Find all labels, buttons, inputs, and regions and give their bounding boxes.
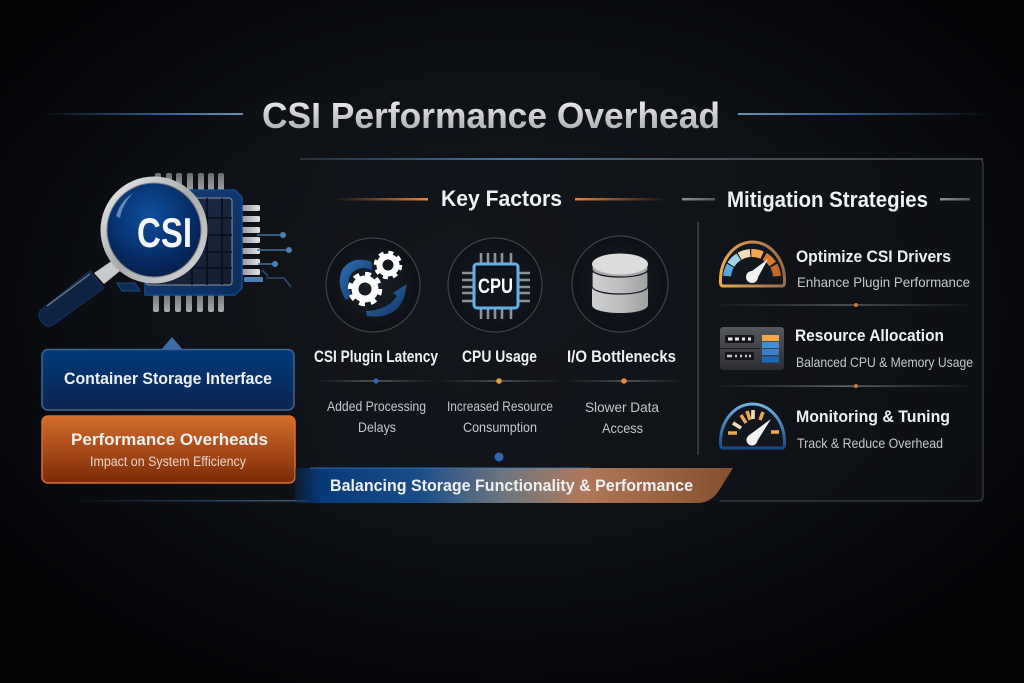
column: I/O Bottlenecks: Access — [602, 420, 643, 436]
icon: gears — [326, 238, 420, 332]
icon: CSI magnifier over chip — [39, 173, 292, 326]
icon: CPU: CPU — [478, 275, 513, 298]
strategy: Monitoring & Tuning: Track & Reduce Overhead — [797, 435, 943, 451]
strategy: Optimize CSI Drivers: Enhance Plugin Performance — [797, 274, 970, 290]
strategy: Resource Allocation — [719, 326, 973, 388]
strategy: Monitoring & Tuning: Monitoring & Tuning — [796, 407, 950, 426]
column: CPU Usage — [443, 238, 557, 435]
panel: main frame — [60, 158, 983, 502]
strategy: Resource Allocation: Balanced CPU & Memory Usage — [796, 354, 973, 370]
column: I/O Bottlenecks: Slower Data — [585, 399, 659, 415]
chip pins — [153, 173, 263, 312]
magnifier lens — [100, 176, 208, 284]
chip body — [117, 190, 242, 295]
column: CSI Plugin Latency: CSI Plugin Latency — [314, 347, 438, 366]
strategy: Optimize CSI Drivers: Optimize CSI Drivers — [796, 247, 951, 266]
label: Performance Overheads — [42, 416, 295, 483]
icon: server rack — [720, 327, 784, 370]
banner: Balancing Storage Functionality & Performance — [295, 468, 733, 503]
icon: tuning gauge — [720, 404, 785, 448]
column: CSI Plugin Latency: Delays — [358, 419, 396, 435]
title: CSI Performance Overhead — [262, 95, 720, 136]
circuit traces — [257, 232, 292, 287]
banner: Balancing Storage Functionality & Performance: Balancing Storage Functionality & Performance — [330, 476, 693, 495]
column: I/O Bottlenecks — [567, 236, 679, 436]
column: CPU Usage: CPU Usage — [462, 347, 537, 366]
icon: performance gauge — [717, 242, 787, 313]
label: Performance Overheads: Impact on System Efficiency — [90, 454, 246, 469]
strategy: Monitoring & Tuning — [720, 404, 950, 451]
magnifier lens: CSI — [137, 209, 192, 256]
heading: Key Factors: Key Factors — [441, 186, 562, 211]
label: Container Storage Interface — [42, 350, 294, 410]
label: Performance Overheads: Performance Overheads — [71, 430, 268, 449]
strategy: Resource Allocation: Resource Allocation — [795, 326, 944, 345]
icon: CPU — [448, 238, 542, 332]
column: CSI Plugin Latency: Added Processing — [327, 398, 426, 414]
magnifier handle — [39, 260, 120, 326]
label: Container Storage Interface: Container Storage Interface — [64, 369, 272, 388]
icon: database — [572, 236, 668, 332]
column: CPU Usage: Increased Resource — [447, 398, 553, 414]
pointer triangle — [161, 337, 183, 350]
dot marker — [494, 452, 504, 462]
column: CSI Plugin Latency — [314, 238, 438, 435]
strategy: Optimize CSI Drivers — [717, 242, 970, 313]
column: CPU Usage: Consumption — [463, 419, 537, 435]
heading: Mitigation Strategies: Mitigation Strategies — [727, 187, 928, 212]
column: I/O Bottlenecks: I/O Bottlenecks — [567, 347, 676, 366]
